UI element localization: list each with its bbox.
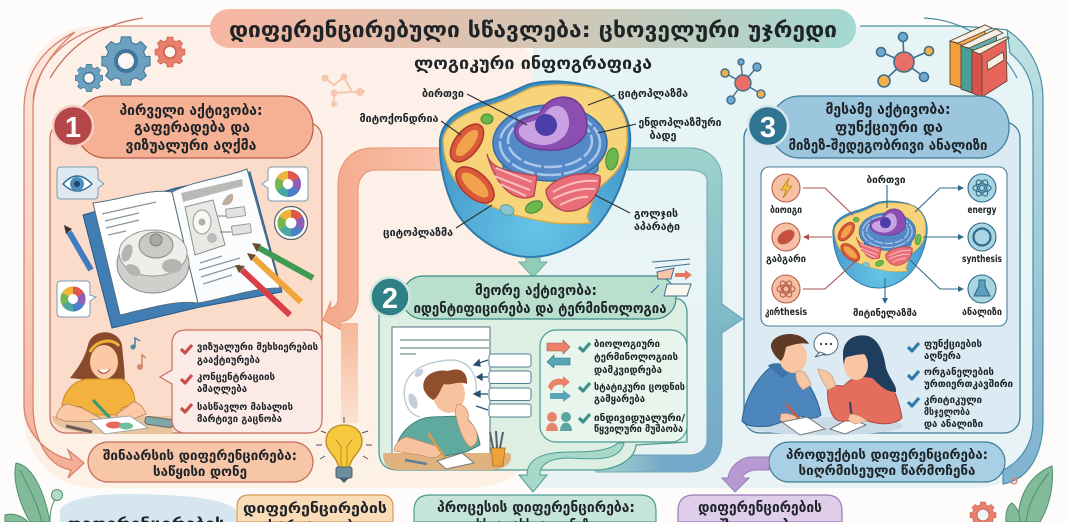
cell labels: ბირთვი xyxy=(422,88,464,100)
panel 2 bullet list: წყვილური მუშაობა xyxy=(594,423,683,435)
left outer flow band with arrow xyxy=(24,18,212,478)
panel 3 bullet list: ურთიერთკავშირი xyxy=(924,378,1013,390)
panel 3 header xyxy=(770,96,1009,158)
panel 3 bullet list: ორგანელების xyxy=(924,366,994,378)
number badge 1: 1 xyxy=(65,112,81,144)
cell labels: ციტოპლაზმა xyxy=(383,227,453,239)
cell labels: ბადე xyxy=(650,130,677,142)
panel 2 header xyxy=(402,276,676,319)
open book xyxy=(83,169,282,328)
speech bubble xyxy=(814,333,838,357)
panel 3 bullet list: და ანალიზი xyxy=(924,418,983,430)
product differentiation pill: სიღრმისეული წარმოჩენა xyxy=(798,463,976,479)
function labels: კირthesis xyxy=(765,306,807,318)
benefits bubble: კონცენტრაციის xyxy=(197,371,275,383)
cell labels: მიტოქონდრია xyxy=(360,113,439,125)
panel 2 header: იდენტიფიცირება და ტერმინოლოგია xyxy=(414,301,667,317)
panel 3 header: ფუნქციური და xyxy=(835,120,943,136)
boy at desk xyxy=(383,369,511,470)
benefits bubble: გააქტიურება xyxy=(197,354,260,366)
content differentiation pill xyxy=(88,442,313,482)
flow arrow: cell to panel 3 xyxy=(596,148,743,472)
panel 3 bullet list: კრიტიკული xyxy=(924,394,982,406)
function labels: synthesis xyxy=(962,254,1002,265)
background panel: right half xyxy=(533,26,1043,488)
panel 1 header: ვიზუალური აღქმა xyxy=(126,138,257,154)
bottom panel: differentiation heading xyxy=(60,494,236,522)
panel 3 bullet list: აღწერა xyxy=(924,350,961,362)
number badge 3: 3 xyxy=(760,112,776,144)
benefits bubble: ვიზუალური მეხსიერების xyxy=(197,341,318,353)
function labels: ბირთვი xyxy=(866,174,906,186)
panel 1 header: გაფერადება და xyxy=(134,120,250,136)
right outer flow band xyxy=(860,18,1043,484)
panel 1: visual perception xyxy=(50,96,322,434)
icon: faint molecule xyxy=(322,74,365,106)
cell labels: ციტოპლაზმა xyxy=(618,88,688,100)
function labels: ანალიზი xyxy=(962,306,1002,318)
cell labels: ენდოპლაზმური xyxy=(638,117,722,129)
panel 3 bullet list: ფუნქციების xyxy=(924,338,982,350)
icon: colour wheel bubble small xyxy=(57,281,96,317)
icon: gears xyxy=(75,37,185,92)
panel 3 header: მიზეზ-შედეგობრივი ანალიზი xyxy=(788,138,988,154)
panel 2 bullet list: გამყარება xyxy=(594,393,645,405)
cell labels: აპარატი xyxy=(634,221,680,233)
benefits bubble: ამაღლება xyxy=(197,383,247,395)
function labels: ბიოიგი xyxy=(770,204,802,216)
bottom box: differentiation strategies xyxy=(237,495,393,522)
panel 2 bullet list: დამკვიდრება xyxy=(594,364,662,376)
icon: molecule small xyxy=(721,59,765,104)
bottom box: differentiation purple xyxy=(678,495,842,522)
benefits bubble xyxy=(160,330,322,433)
icon: molecule large xyxy=(876,32,934,87)
panel 1 header: პირველი აქტივობა: xyxy=(120,103,262,119)
panel 1 header xyxy=(76,96,313,158)
number badge 1 xyxy=(53,106,93,146)
panel 2 bullet list: ინდივიდუალური/ xyxy=(594,412,685,424)
icon: note cards xyxy=(651,259,692,296)
cell labels xyxy=(360,88,722,239)
bottom box: differentiation strategies: დიფერენცირების xyxy=(243,501,387,517)
icon: plant left xyxy=(5,463,62,522)
icon: light bulb xyxy=(316,417,372,483)
panel 3 bullet list: მსჯელობა xyxy=(924,406,970,418)
flow arrow: cell to panel 1 xyxy=(323,148,442,423)
content differentiation pill: საწყისი დონე xyxy=(153,464,247,480)
product differentiation pill xyxy=(769,442,1005,482)
function labels: გაბგარი xyxy=(766,253,806,265)
girl drawing xyxy=(52,332,174,434)
panel 3 header: მესამე აქტივობა: xyxy=(826,102,950,118)
number badge 2: 2 xyxy=(382,283,398,315)
benefits bubble: მარტივი გაცნობა xyxy=(197,413,282,425)
function labels xyxy=(765,174,1002,319)
content differentiation pill: შინაარსის დიფერენცირება: xyxy=(103,448,297,464)
functional cell diagram xyxy=(761,167,1007,326)
number badge 3 xyxy=(748,106,788,146)
panel 2 bullet list: ბიოლოგიური xyxy=(594,338,660,350)
panel 2 bullet list xyxy=(540,330,687,442)
benefits bubble: სასწავლო მასალის xyxy=(197,401,293,413)
panel 2 header: მეორე აქტივობა: xyxy=(475,283,597,299)
panel 2: identification and terminology xyxy=(370,259,692,470)
worksheet with blank labels xyxy=(392,327,531,455)
bottom box: process differentiation xyxy=(414,495,656,522)
panel 3: functional analysis xyxy=(742,96,1020,435)
flow arrow: cell down to panel 2 xyxy=(519,252,547,277)
function labels: energy xyxy=(968,205,997,216)
two students discussing xyxy=(742,334,903,435)
title banner: დიფერენცირებული სწავლება: ცხოველური უჯრედი xyxy=(229,18,837,42)
panel 3 bullet list xyxy=(908,338,1013,430)
icon: colour wheel bubble xyxy=(262,167,308,201)
flow arrow: product pill to bottom xyxy=(722,457,769,492)
bottom box: differentiation purple: დიფერენცირების xyxy=(698,500,822,516)
cell labels: გოლჯის xyxy=(634,208,678,220)
icon: plant right xyxy=(1006,466,1052,522)
panel 2 bullet list: სტატიკური ცოდნის xyxy=(594,381,685,393)
function icons left xyxy=(772,174,800,303)
product differentiation pill: პროდუქტის დიფერენცირება: xyxy=(786,447,988,463)
background panel: left half xyxy=(24,26,544,488)
function labels: მიტინელაზმა xyxy=(853,307,917,319)
function icons right xyxy=(968,174,996,303)
panel 2 bullet list: ტერმინოლოგიის xyxy=(594,351,678,363)
flow arrow: panel 2 to process pill xyxy=(519,443,624,492)
animal cell diagram xyxy=(360,81,722,257)
icon: gear bottom right xyxy=(970,478,1017,522)
number badge 2 xyxy=(370,278,410,316)
bottom box: process differentiation: პროცესის დიფერენცირება: xyxy=(437,500,635,516)
coloured pencils xyxy=(64,225,313,315)
title banner xyxy=(210,9,856,48)
icon: books xyxy=(950,25,1009,97)
icon: colour palette round xyxy=(274,206,308,240)
icon: eye bubble xyxy=(57,167,104,199)
subtitle: ლოგიკური ინფოგრაფიკა xyxy=(414,54,652,74)
